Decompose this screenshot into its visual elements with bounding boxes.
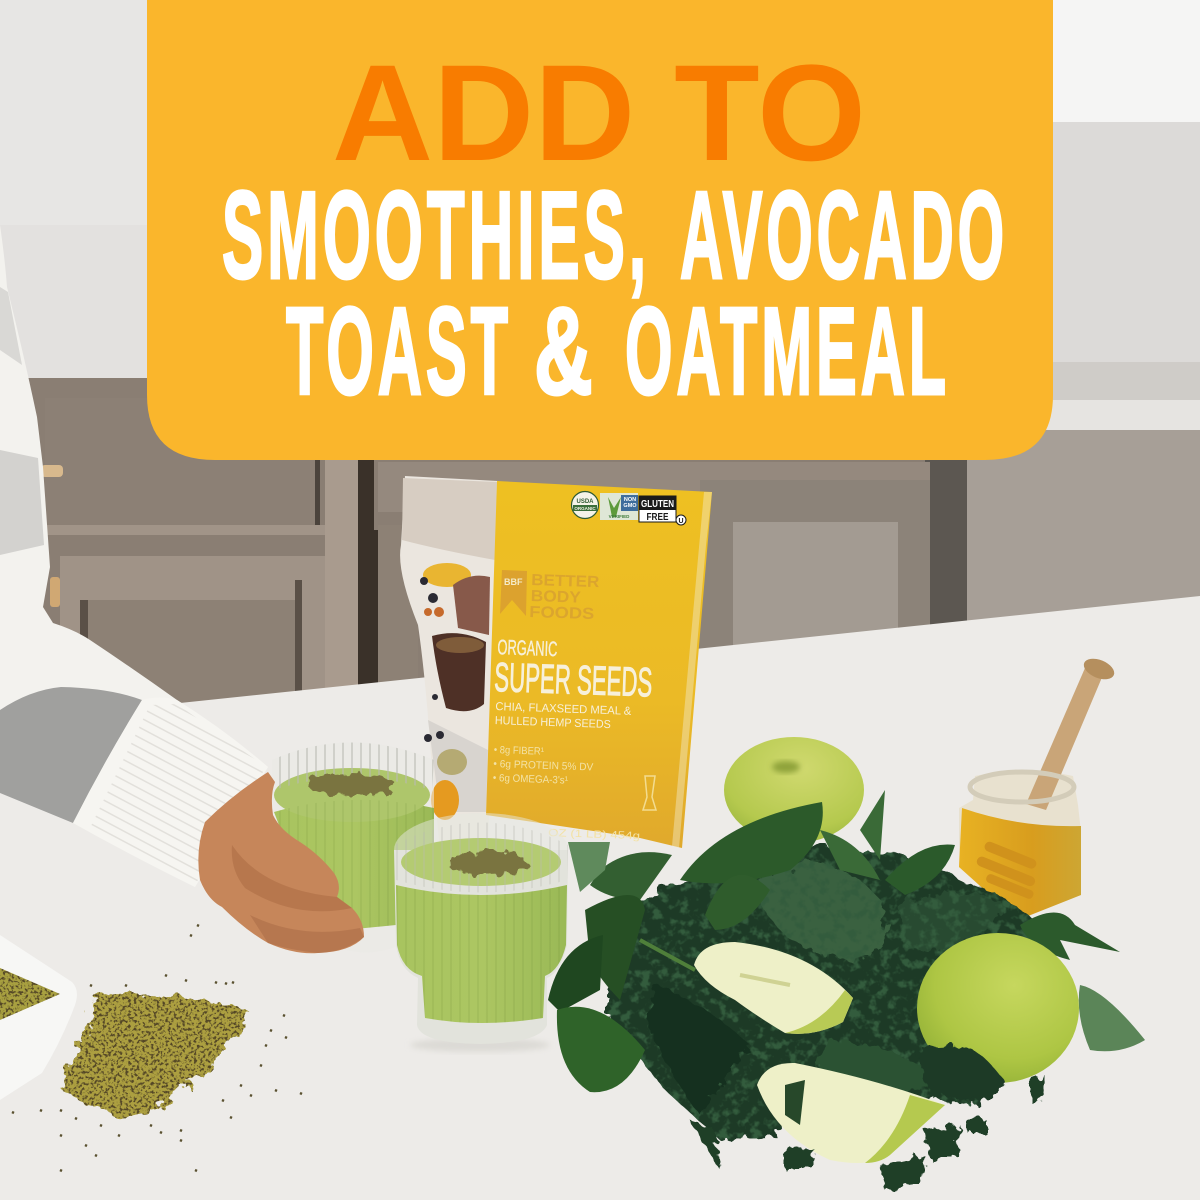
BBF logo: BODY (531, 588, 581, 607)
large green apple (917, 933, 1079, 1083)
glass shadow on counter (410, 1038, 550, 1052)
product name and claims: • 8g FIBER¹ (494, 744, 544, 758)
kale overlapping apple base (915, 1045, 1005, 1100)
yellow headline panel (147, 0, 1053, 460)
certification badges: ORGANIC (574, 506, 596, 511)
BBF logo: BBF (504, 577, 523, 587)
apple slice lower (757, 1063, 945, 1163)
certification badges: NON (624, 497, 636, 503)
certification badges: VERIFIED (609, 514, 630, 519)
counter top (0, 596, 1200, 1200)
whole apple behind greens (724, 737, 864, 843)
wooden handle (1026, 668, 1103, 810)
headline: ADD TO: ADD TO (332, 37, 866, 190)
front smoothie glass (394, 813, 568, 1044)
blender icon (643, 776, 656, 810)
BBF logo (500, 570, 600, 623)
jar glass (959, 770, 1081, 920)
rear smoothie glass (272, 742, 434, 952)
certification badges: USDA (576, 499, 594, 505)
product name and claims: SUPER SEEDS (494, 654, 653, 705)
product name and claims: CHIA, FLAXSEED MEAL & (495, 701, 632, 718)
pile of seeds on counter (12, 925, 302, 1171)
pouch yellow front (486, 481, 712, 848)
kale crumbs on counter (690, 1075, 1045, 1190)
honey fill (959, 808, 1081, 920)
certification badges: GMO (623, 503, 637, 509)
certification badges: GLUTEN (641, 499, 674, 510)
BBF logo: FOODS (529, 604, 595, 623)
headline: TOAST & OATMEAL: & (534, 283, 598, 421)
product name and claims: • 6g OMEGA-3's¹ (493, 772, 569, 787)
certification badges: FREE (646, 512, 669, 523)
apple slice upper (694, 942, 853, 1034)
hand holding glass (198, 772, 364, 953)
pouch left side with photo (400, 476, 498, 850)
honey jar with dipper (959, 655, 1117, 920)
sweater sleeve and arm (0, 225, 268, 887)
product pouch: Better Body Foods Organic Super Seeds (400, 476, 712, 850)
certification badges (572, 492, 686, 525)
jar rim (970, 772, 1074, 802)
spinach leaves (680, 802, 823, 883)
net weight: OZ (1 LB) 454g (548, 827, 640, 842)
white bowl of seeds (0, 935, 80, 1100)
headline: TOAST & OATMEAL (286, 283, 950, 421)
headline: SMOOTHIES, AVOCADO: SMOOTHIES, (222, 167, 650, 305)
headline: TOAST & OATMEAL: TOAST (286, 283, 512, 421)
product name and claims: HULLED HEMP SEEDS (495, 715, 611, 731)
BBF logo: BETTER (531, 572, 600, 591)
product name and claims: ORGANIC (497, 636, 558, 661)
kale mass (610, 847, 1050, 1140)
product name and claims (491, 636, 654, 789)
certification badges: U (678, 518, 684, 525)
dipper in honey (975, 840, 1038, 900)
product name and claims: • 6g PROTEIN 5% DV (493, 758, 594, 773)
leafy greens pile: spinach and kale (548, 790, 1145, 1140)
